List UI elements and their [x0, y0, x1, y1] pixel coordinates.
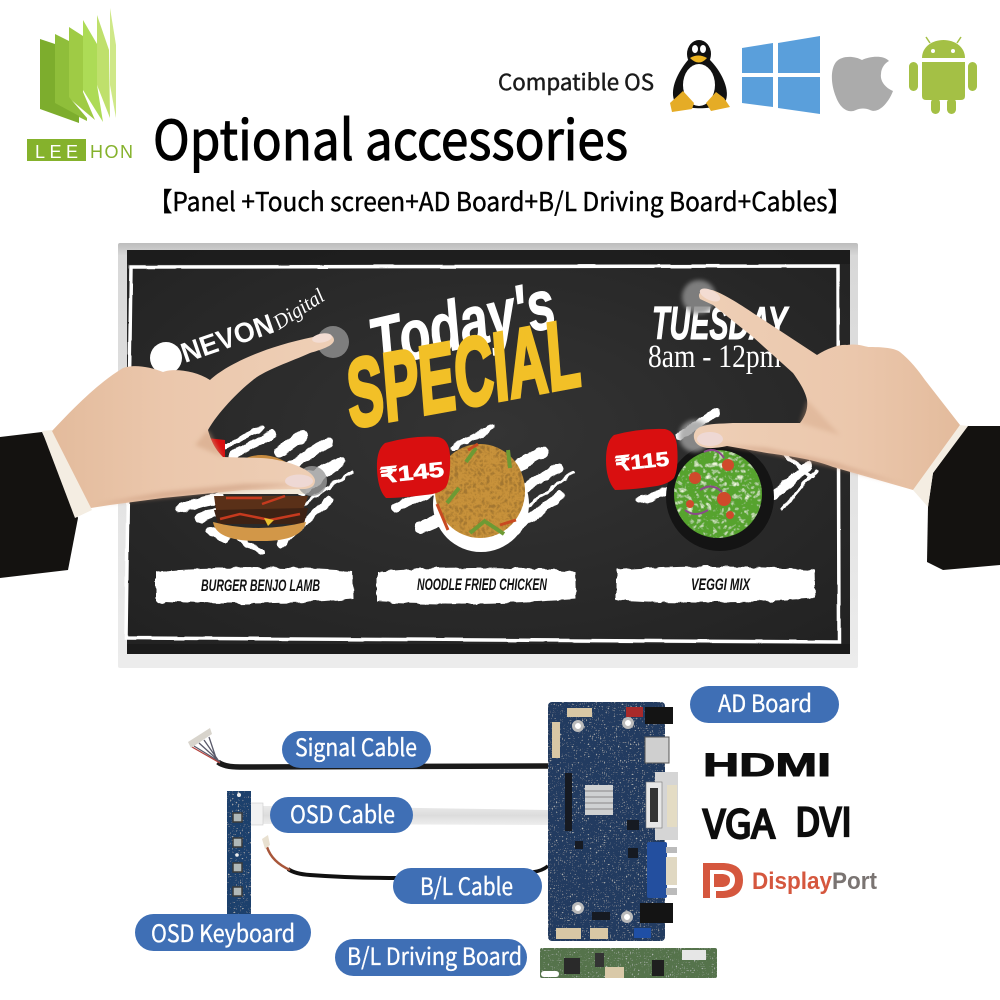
- logo text: VGA: VGA: [703, 794, 775, 850]
- brand: Nevon Digital: Digital: [268, 283, 329, 335]
- board connectors: [552, 708, 608, 939]
- item: burger: [180, 428, 352, 552]
- hand: [694, 290, 960, 490]
- jacket sleeve: [927, 426, 1000, 570]
- item: salad: [640, 412, 816, 551]
- label: AD Board: [690, 684, 839, 723]
- board PCB: [548, 702, 665, 941]
- item: noodles: [395, 428, 573, 552]
- plaque: noodle fried chicken: NOODLE FRIED CHICKEN: [417, 575, 547, 594]
- price tag: 145: ₹145: [379, 458, 446, 488]
- screen bezel: [118, 243, 858, 668]
- plaque: veggi mix: [616, 566, 815, 603]
- price tag: hidden by hand: [162, 438, 225, 497]
- logo: DisplayPort: [703, 863, 877, 898]
- brand: Nevon Digital: [150, 283, 329, 374]
- plaque: noodle fried chicken: [377, 568, 576, 604]
- logo text: DVI: DVI: [795, 792, 852, 848]
- title: Optional accessories: [153, 96, 628, 176]
- B/L driving board: [540, 948, 717, 978]
- right arm: [694, 286, 1000, 570]
- fingernails: [311, 332, 333, 344]
- schedule: Tuesday 8am - 12pm: [648, 297, 790, 375]
- screen chalkboard: [127, 250, 850, 654]
- icon: Android: [909, 37, 977, 114]
- chips and headers: [565, 773, 639, 920]
- compatible OS label: Compatible OS: [498, 65, 654, 97]
- VGA port: [647, 842, 677, 898]
- shirt cuff: [42, 430, 92, 518]
- label: AD Board: AD Board: [718, 684, 812, 719]
- DVI port: [646, 772, 678, 840]
- logo text: HDMI: HDMI: [703, 747, 831, 783]
- label: OSD Cable: OSD Cable: [290, 795, 395, 830]
- subtitle: 【Panel +Touch screen+AD Board+B/L Driving Board+Cables】: [148, 182, 852, 219]
- headline: Today's Special: SPECIAL: [343, 299, 584, 449]
- plaque: burger benjo lamb: [156, 568, 354, 604]
- headline: Today's Special: [343, 264, 584, 449]
- logo: LEEHON: LEE: [35, 142, 78, 162]
- hand: [52, 334, 334, 508]
- icon: Apple: [832, 57, 893, 111]
- logo: LEEHON: [27, 8, 133, 162]
- icon: Windows: [742, 36, 820, 114]
- signal cable: [188, 728, 548, 767]
- chalk frame: [126, 266, 839, 642]
- logo: LEEHON: HON: [90, 142, 133, 162]
- price tag: 115: ₹115: [614, 448, 670, 476]
- schedule: Tuesday 8am - 12pm: TUESDAY: [652, 297, 790, 349]
- label: OSD Keyboard: OSD Keyboard: [151, 914, 295, 949]
- B/L cable: [262, 835, 548, 878]
- label: B/L Driving Board: B/L Driving Board: [347, 937, 522, 972]
- left arm: [0, 332, 334, 578]
- price tag: 115: [606, 429, 678, 490]
- panel: touch screen: [118, 243, 858, 668]
- AD board: [548, 702, 678, 941]
- fingernails: [698, 286, 722, 304]
- logo: DisplayPort: DisplayPort: [752, 868, 877, 895]
- plaque: veggi mix: VEGGI MIX: [691, 575, 751, 594]
- price tag: 145: [377, 437, 450, 498]
- jacket sleeve: [0, 432, 78, 578]
- heat sink: [585, 785, 613, 815]
- icon: Linux penguin: [670, 40, 730, 112]
- shirt cuff: [913, 425, 968, 507]
- label: Signal Cable: Signal Cable: [295, 728, 417, 763]
- plaque: burger benjo lamb: BURGER BENJO LAMB: [201, 576, 320, 595]
- OSD keyboard: [227, 791, 251, 915]
- brand: Nevon Digital: NEVON: [177, 308, 278, 369]
- label: B/L Cable: [393, 867, 542, 904]
- HDMI port: [645, 737, 669, 763]
- schedule: Tuesday 8am - 12pm: 8am - 12pm: [648, 339, 781, 375]
- mounting holes: [574, 718, 632, 922]
- touch glow points: [297, 280, 716, 496]
- headline: Today's Special: Today's: [362, 264, 563, 383]
- OSD cable: [247, 803, 548, 825]
- label: B/L Cable: B/L Cable: [420, 867, 513, 902]
